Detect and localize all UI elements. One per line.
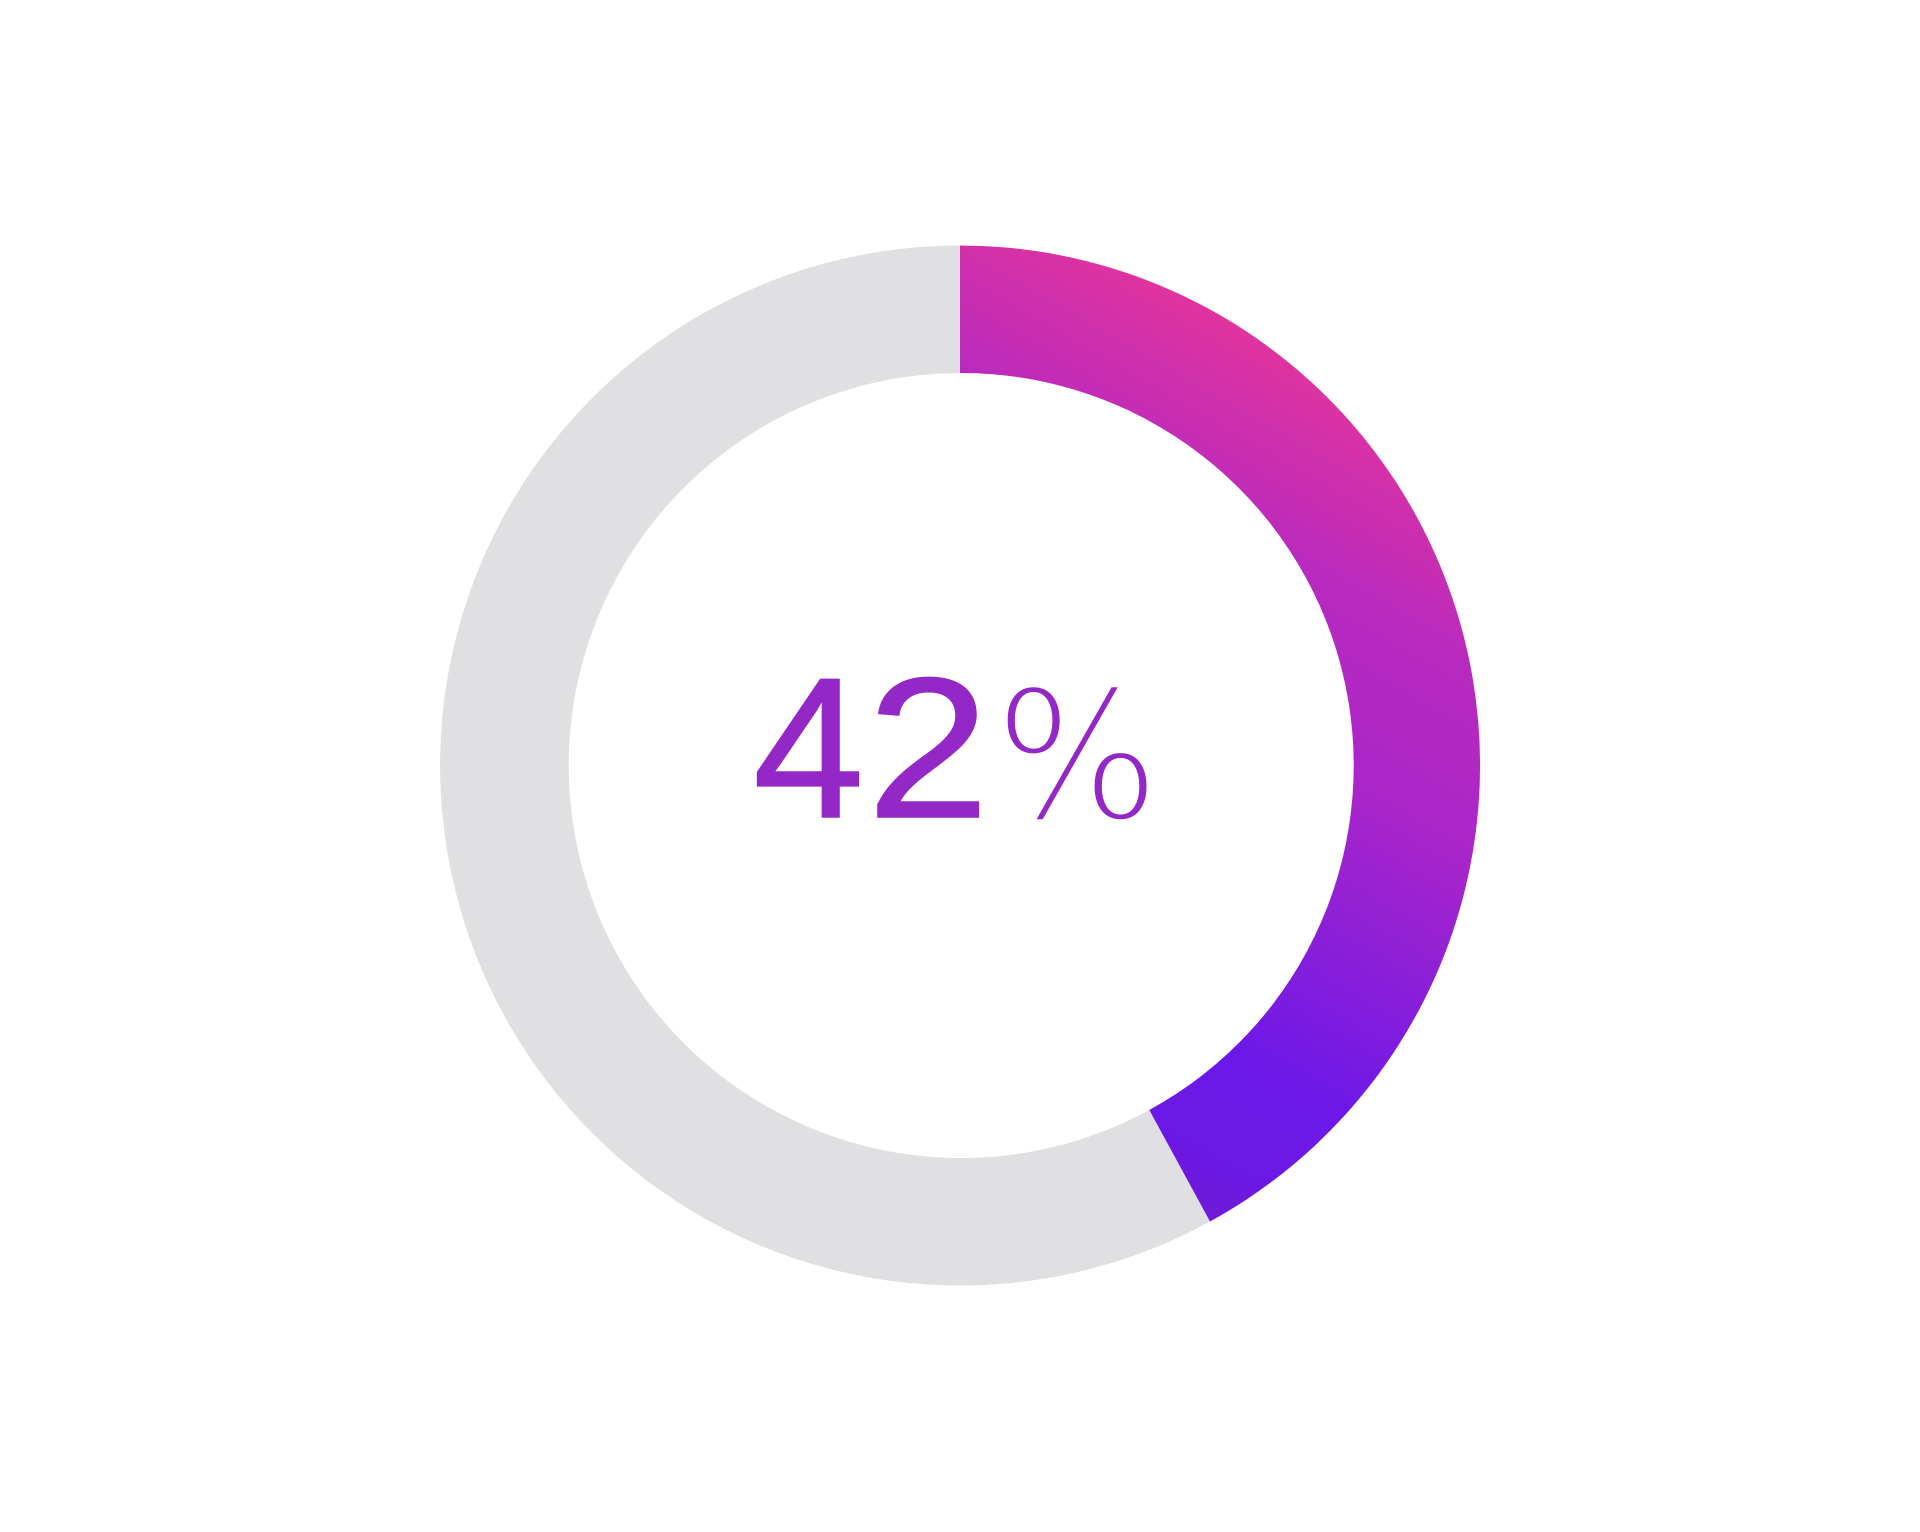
digits 42: 4: [753, 637, 864, 860]
digits 42: [753, 636, 989, 860]
donut track: remaining 58%: [440, 246, 1210, 1286]
digits 42: 2: [867, 636, 989, 860]
percent sign: %: [995, 651, 1159, 864]
center value: 42%: [753, 636, 1159, 864]
donut segment: 42% gradient arc: [960, 245, 1480, 1221]
